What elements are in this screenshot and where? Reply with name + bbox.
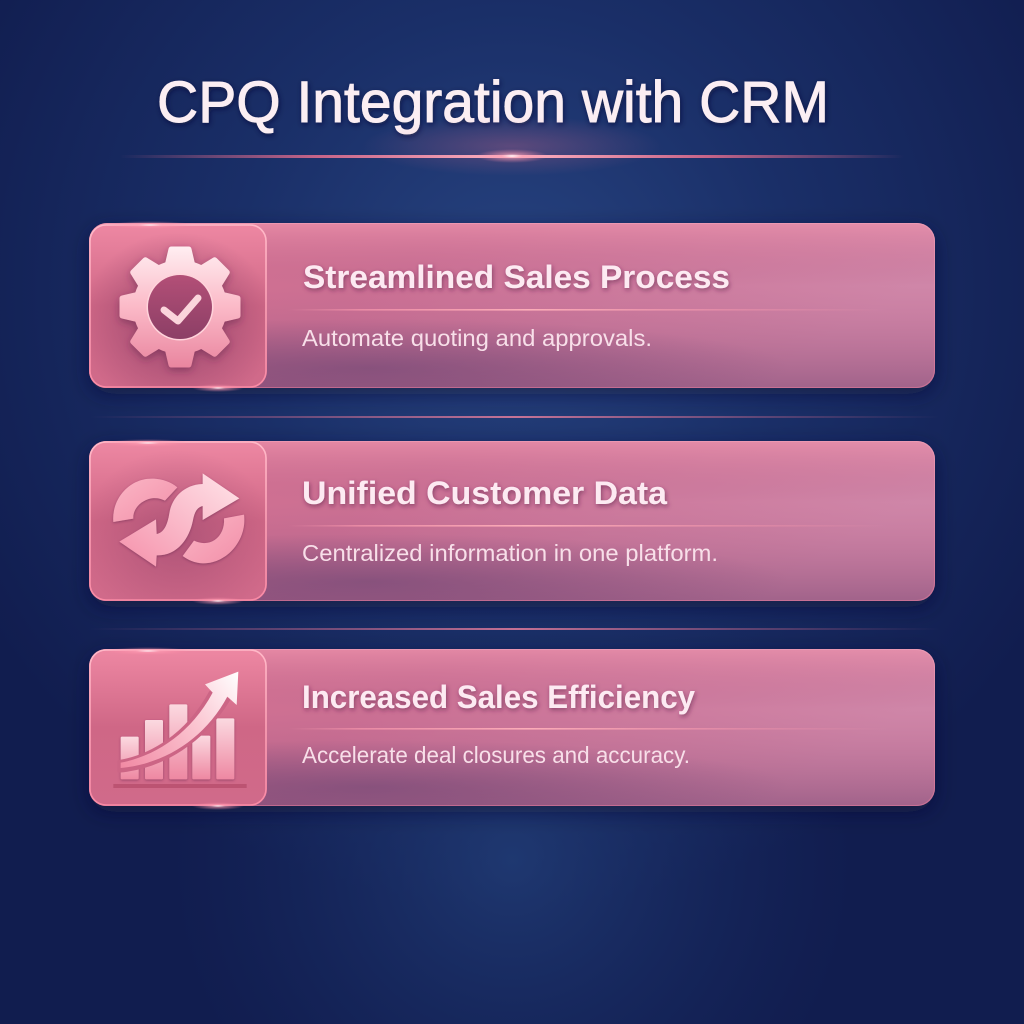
icon tile: growth chart [89, 647, 267, 810]
title glow divider [120, 116, 904, 176]
description: Accelerate deal closures and accuracy. [302, 742, 690, 768]
icon tile: gear with check [89, 221, 267, 392]
panel: increased sales efficiency [89, 647, 935, 810]
heading: Streamlined Sales Process [303, 259, 730, 295]
heading: Increased Sales Efficiency [302, 679, 695, 715]
heading: Unified Customer Data [302, 475, 667, 511]
panel: streamlined sales process [89, 221, 935, 392]
heading rule [288, 309, 888, 311]
description: Centralized information in one platform. [302, 540, 718, 566]
heading rule [288, 728, 888, 730]
description: Automate quoting and approvals. [302, 325, 652, 351]
title: CPQ Integration with CRM [157, 70, 829, 135]
panel: unified customer data [89, 439, 935, 605]
icon tile: sync arrows [89, 439, 267, 605]
heading rule [288, 525, 888, 527]
